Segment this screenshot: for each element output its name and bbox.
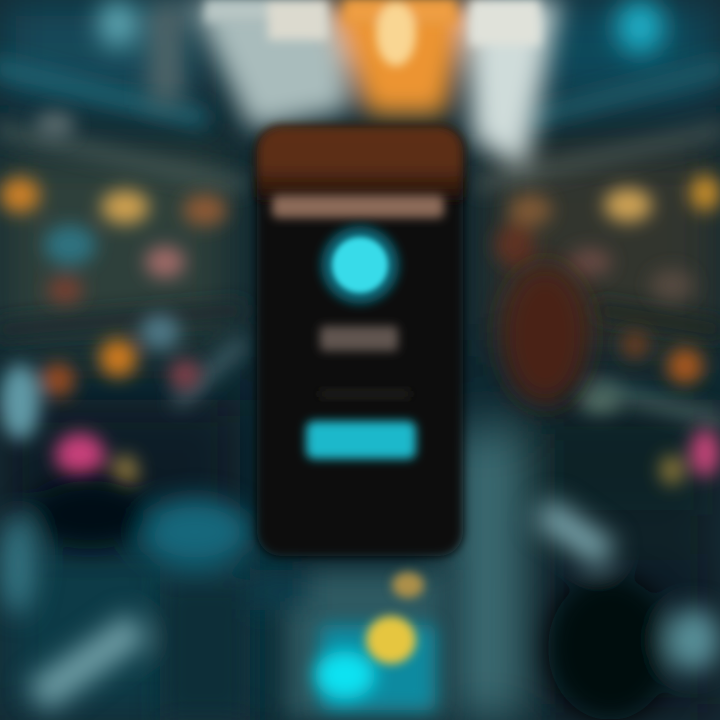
brown shelf goods xyxy=(501,265,589,405)
shelf streaks converging on the phone xyxy=(0,68,720,420)
title bar xyxy=(272,195,444,218)
ceiling light xyxy=(98,0,664,170)
floor glow with coins xyxy=(315,572,435,710)
ceiling light core xyxy=(205,0,540,66)
foreground blurred shapes xyxy=(0,481,720,720)
label text bar xyxy=(320,326,398,351)
right shelves with products xyxy=(495,175,720,485)
smartphone xyxy=(257,126,463,556)
phone header xyxy=(257,126,463,200)
phone body xyxy=(257,128,463,556)
action button xyxy=(306,421,416,459)
left shelves with products xyxy=(0,111,227,489)
app icon xyxy=(321,226,399,304)
